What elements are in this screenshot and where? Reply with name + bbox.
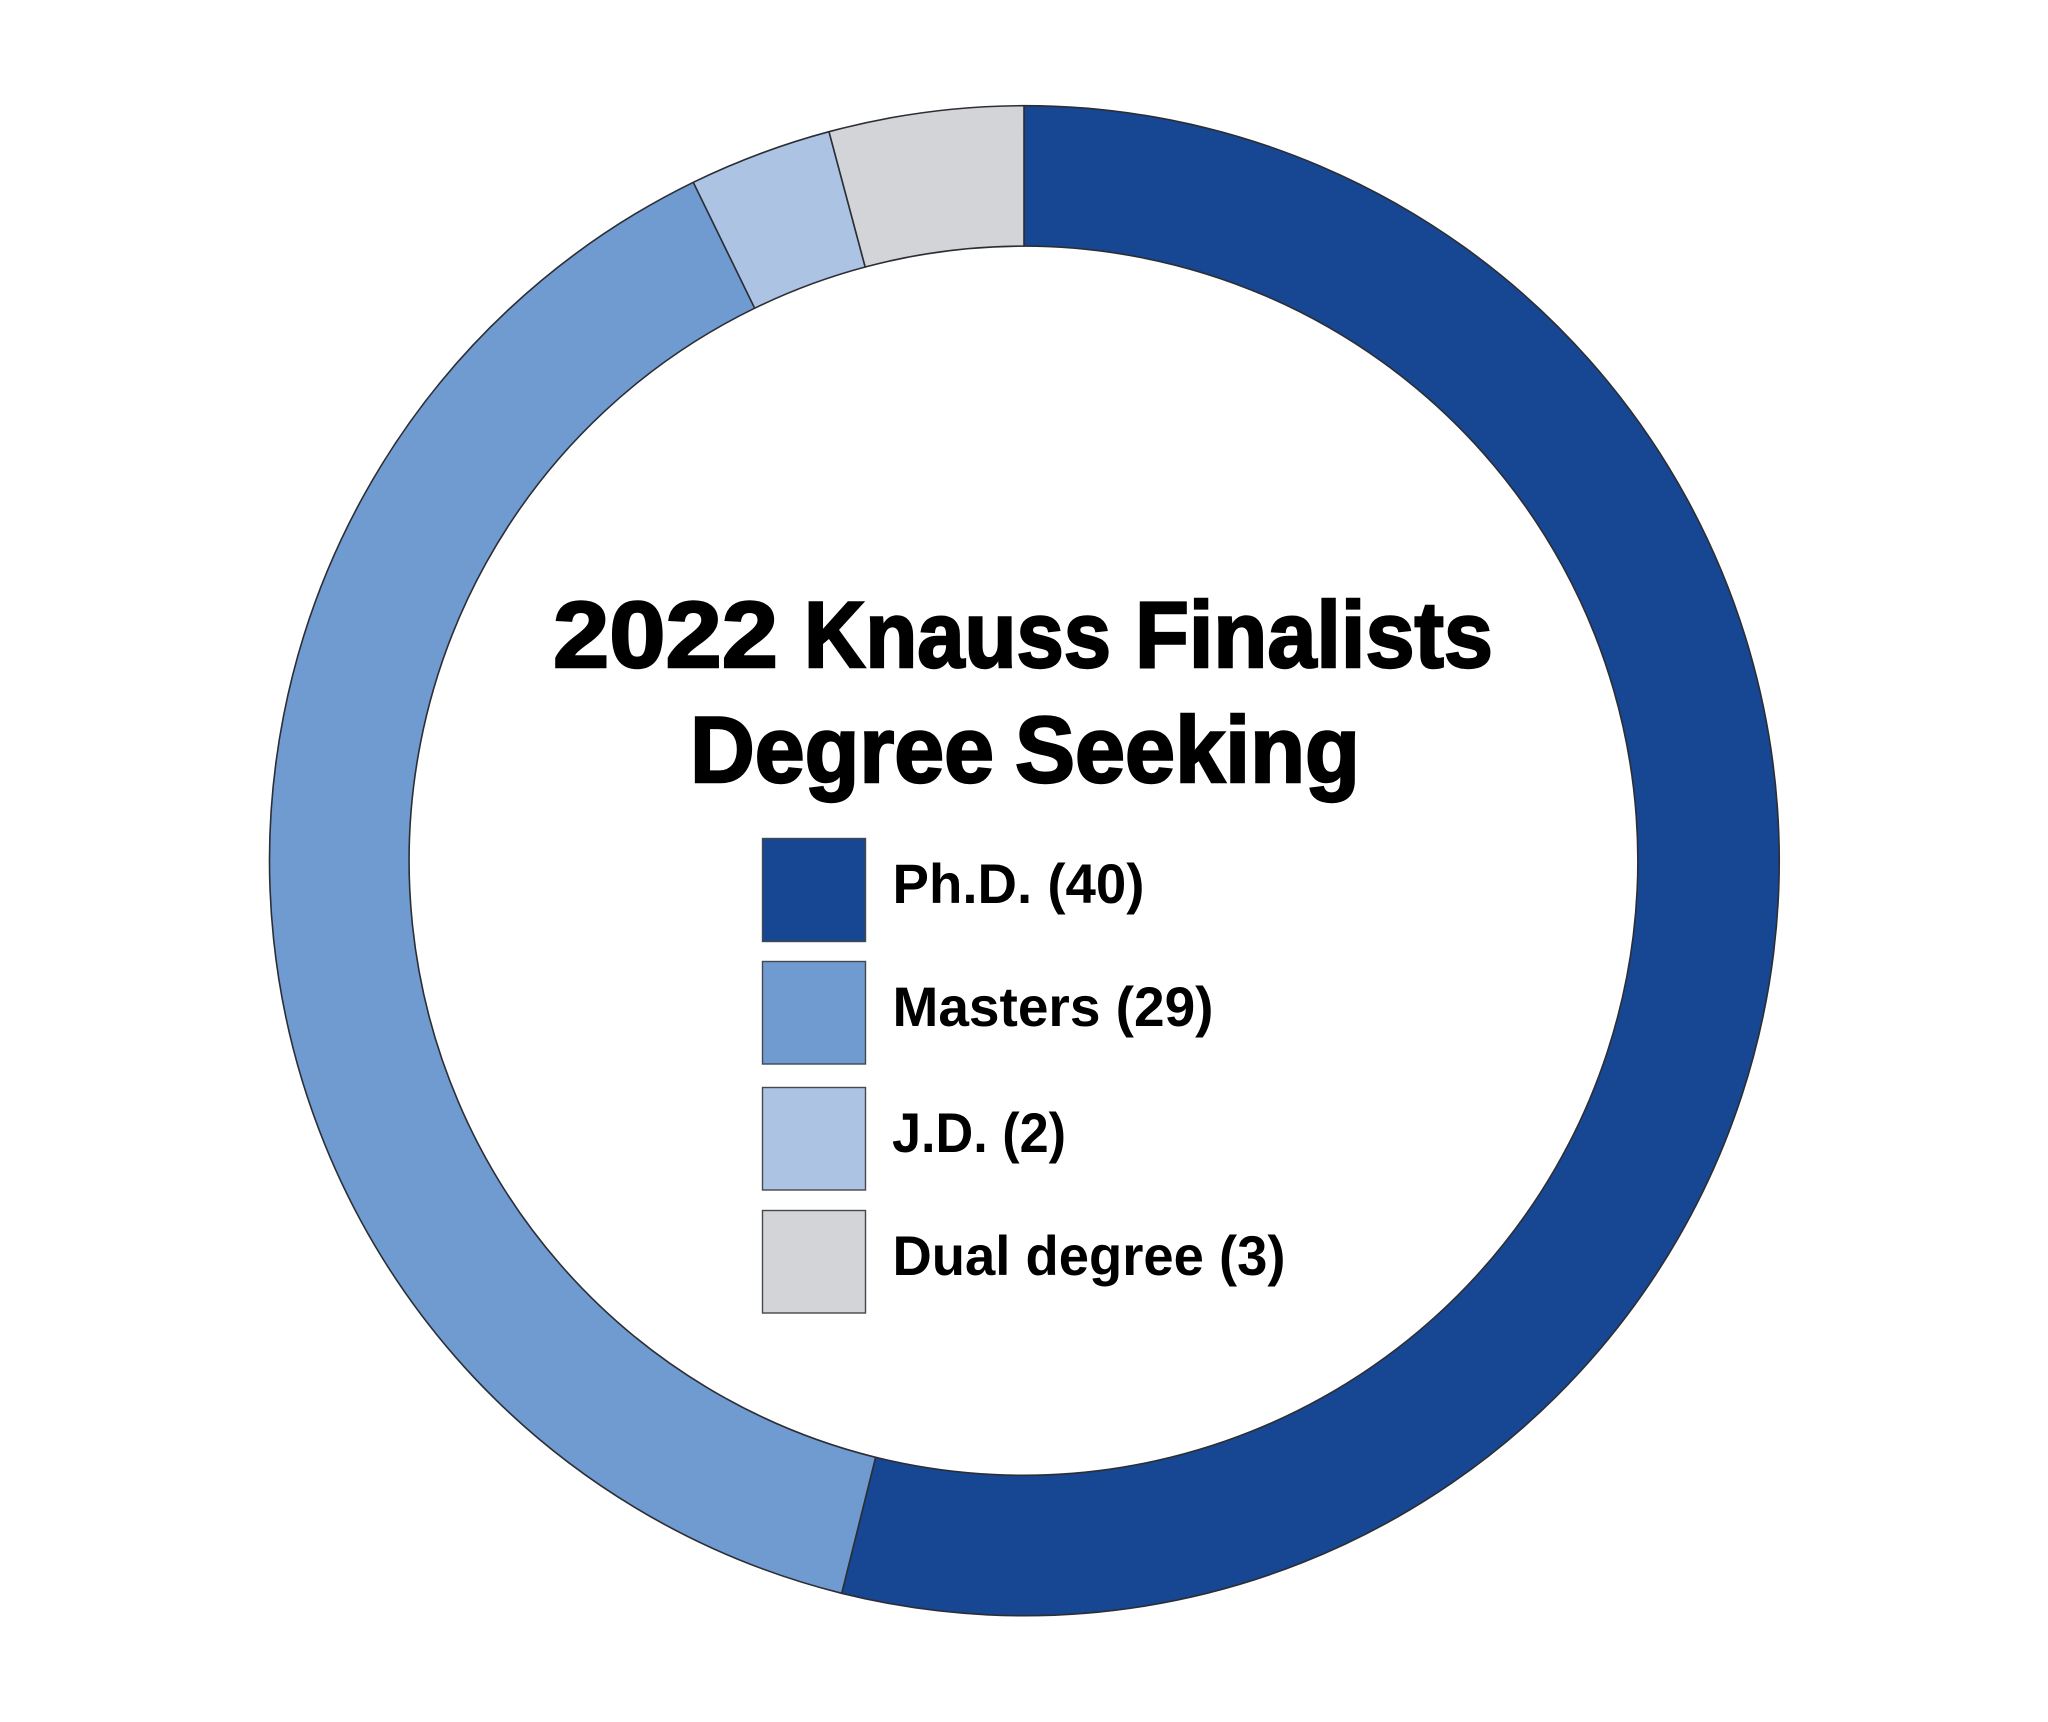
title line 1 xyxy=(553,582,1493,687)
title line 1: Finalists xyxy=(1135,582,1493,687)
title line 2: Degree xyxy=(690,697,994,802)
segment: Dual degree (3) xyxy=(829,106,1024,267)
swatch: Dual degree xyxy=(762,1210,866,1313)
swatch: Masters xyxy=(762,962,866,1064)
label: Masters: Masters (29) xyxy=(892,975,1214,1038)
title line 2 xyxy=(690,697,1360,802)
label: Ph.D.: Ph.D. (40) xyxy=(892,852,1144,915)
swatch: Ph.D. xyxy=(762,838,866,942)
legend xyxy=(762,838,1286,1313)
legend item: Ph.D. xyxy=(762,838,1144,942)
segment: Masters (29) xyxy=(270,182,876,1593)
swatch: J.D. xyxy=(762,1088,866,1190)
label: J.D.: J.D. (2) xyxy=(892,1101,1066,1164)
legend item: J.D. xyxy=(762,1088,1066,1190)
title xyxy=(553,582,1493,802)
title line 2: Seeking xyxy=(1015,697,1360,802)
donut chart: degree seeking xyxy=(270,106,1779,1616)
legend item: Masters xyxy=(762,962,1214,1064)
title line 1: Knauss xyxy=(804,582,1111,687)
segment: Ph.D. (40) xyxy=(842,106,1779,1616)
title line 1: 2022 xyxy=(553,582,778,687)
segment: J.D. (2) xyxy=(693,132,865,308)
label: Dual degree: Dual degree (3) xyxy=(892,1224,1286,1287)
legend item: Dual degree xyxy=(762,1210,1286,1313)
